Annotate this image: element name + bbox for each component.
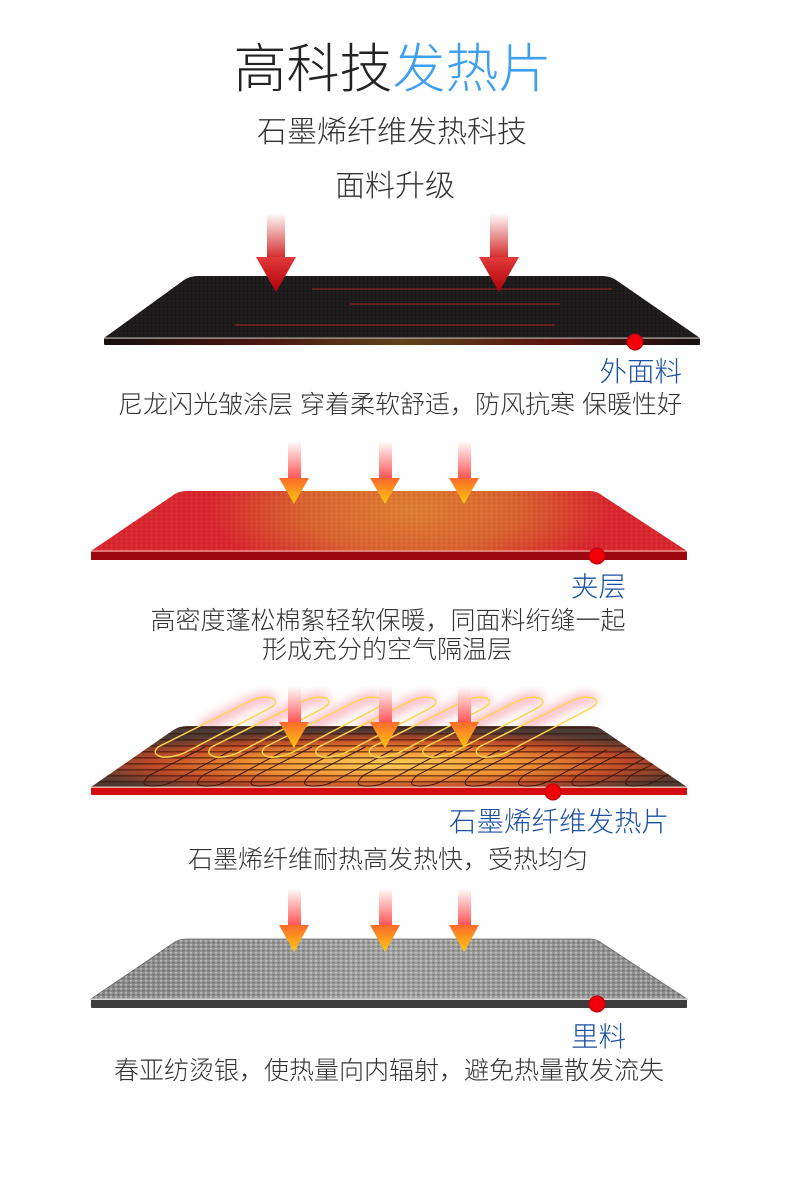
arrow: right red [479,213,519,292]
arrow: left orange [279,888,309,952]
panel: padding layer [91,441,687,664]
lining sheet [91,939,687,1008]
arrow: middle orange [370,888,400,952]
heating sheet [91,726,687,795]
marker dot [589,996,605,1012]
description: outer fabric: 尼龙闪光皱涂层 穿着柔软舒适，防风抗寒 保暖性好 [118,391,682,419]
arrow: left orange [279,686,309,748]
description: padding: 形成充分的空气隔温层 [262,636,512,664]
label: padding: 夹层 [571,571,626,602]
panel: outer fabric layer [104,213,700,419]
lower dark coil loops [144,747,714,786]
arrow: right orange [449,686,479,748]
panel: lining layer [91,888,687,1085]
subtitle line two: 面料升级 [335,170,455,203]
arrow: right orange [449,888,479,952]
padding sheet [91,491,687,560]
arrow: left red [256,213,296,292]
description: lining: 春亚纺烫银，使热量向内辐射，避免热量散发流失 [114,1057,664,1085]
marker dot [589,548,605,564]
label: graphene film: 石墨烯纤维发热片 [449,806,669,837]
description: padding [150,607,626,664]
panel: graphene heating film [91,686,714,874]
arrow: right orange [449,441,479,504]
heating glow above the sheet [200,698,595,728]
arrow: middle orange [370,441,400,504]
marker dot [627,334,643,350]
label: outer fabric: 外面料 [600,356,682,387]
label: lining: 里料 [571,1021,626,1052]
description: padding: 高密度蓬松棉絮轻软保暖，同面料绗缝一起 [150,607,626,635]
marker dot [545,784,561,800]
upper glowing coil loops [155,697,597,757]
arrow: middle orange [370,686,400,748]
subtitle line one: 石墨烯纤维发热科技 [257,116,527,149]
outer fabric sheet [104,276,700,345]
description: graphene film: 石墨烯纤维耐热高发热快，受热均匀 [188,846,588,874]
title: 高科技发热片 [234,40,552,99]
arrow: left orange [279,441,309,504]
